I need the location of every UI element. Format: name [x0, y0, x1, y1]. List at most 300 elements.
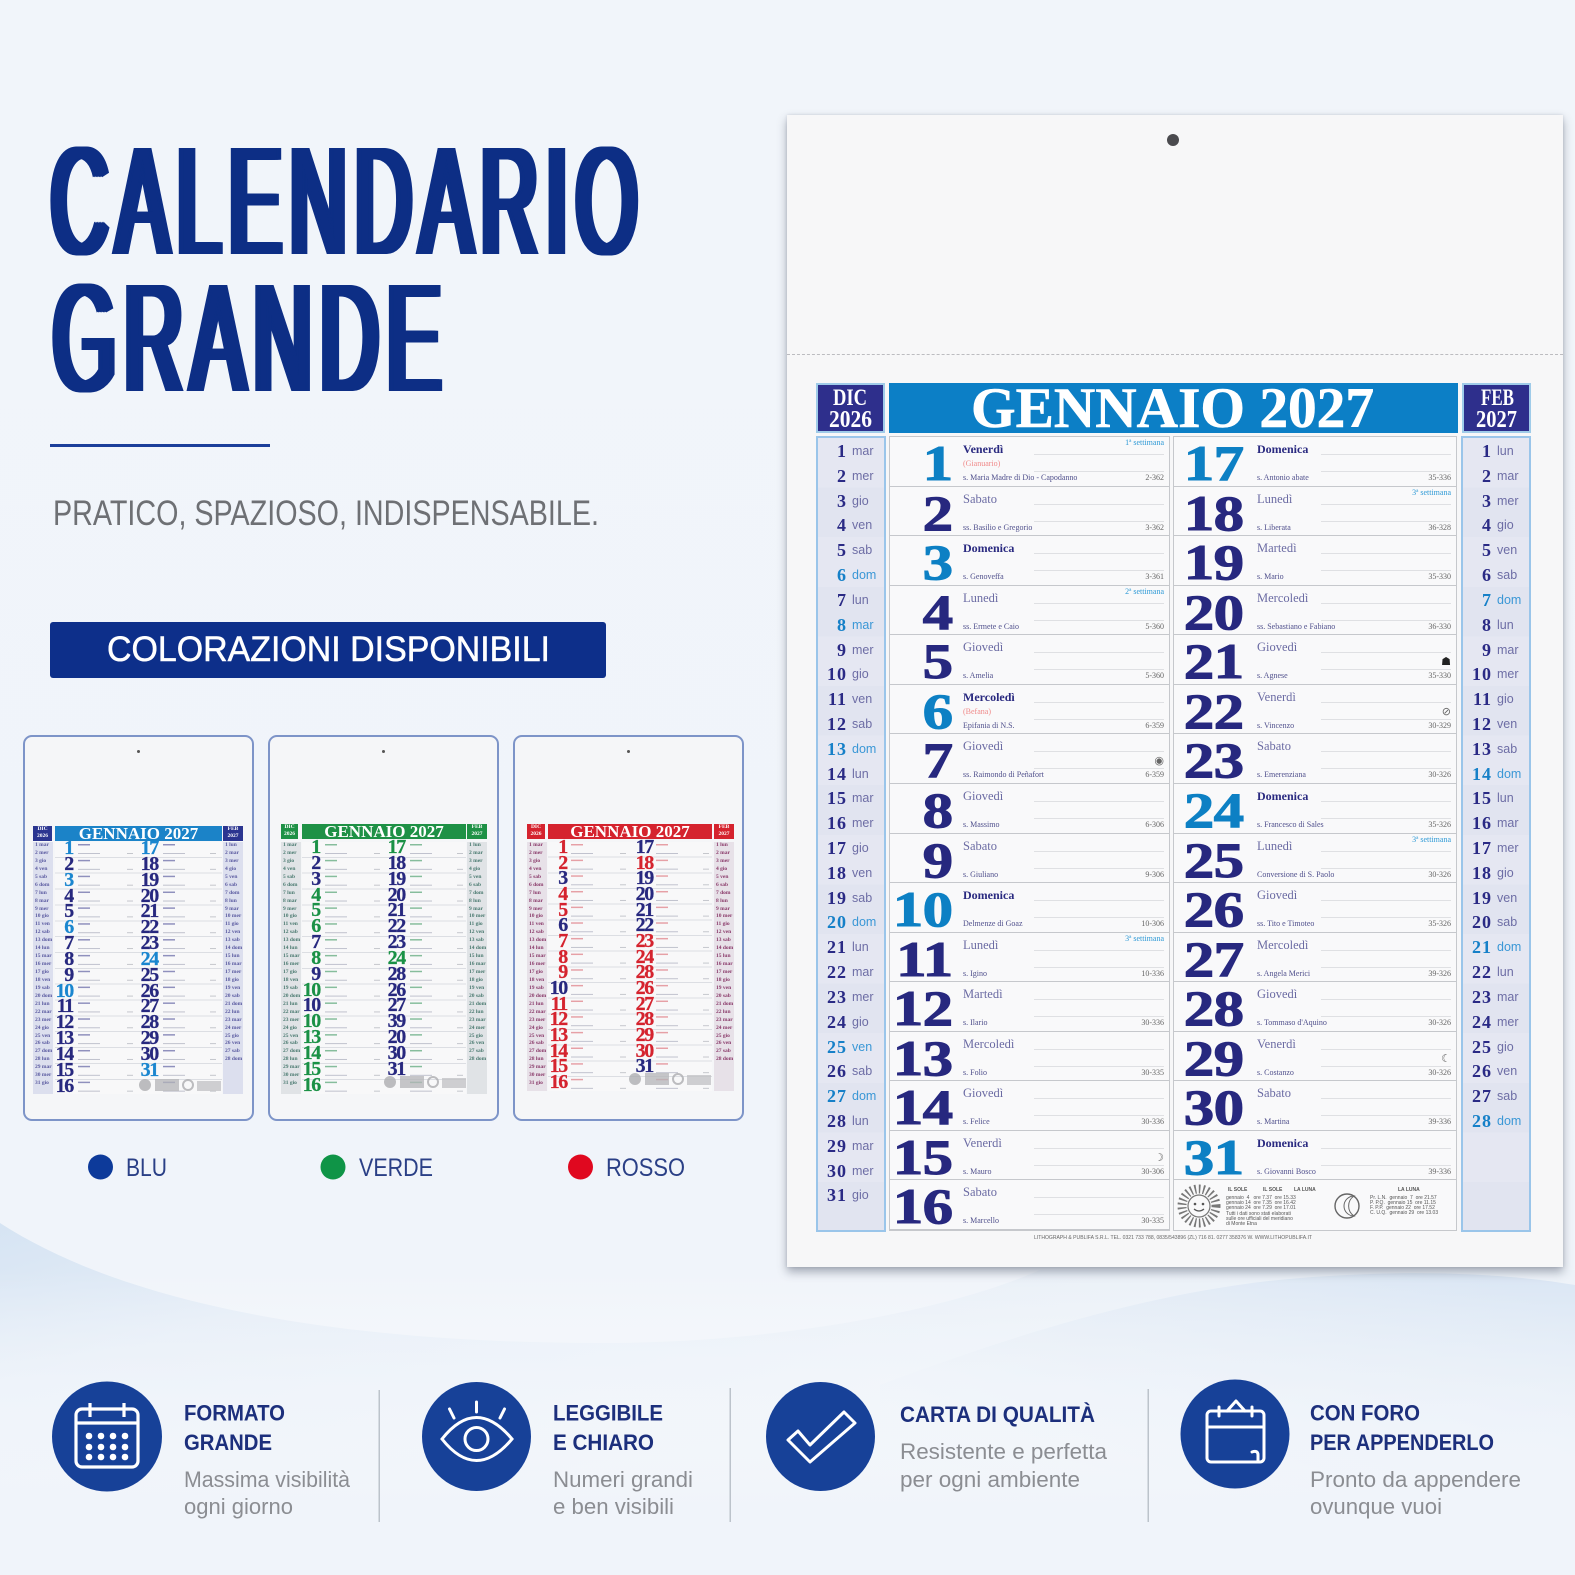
february side column: lun	[1497, 444, 1514, 458]
january days 1 to 16: 9	[923, 832, 952, 888]
december side column: 30	[827, 1161, 847, 1181]
january days 1 to 16: Giovedì	[963, 640, 1003, 654]
thumbnail: red calendar: 12	[550, 1008, 567, 1030]
january days 17 to 31 with sun and moon table: Domenica	[1257, 789, 1308, 803]
thumbnail: green calendar: 2026	[284, 830, 295, 836]
thumbnail: red calendar: 1	[558, 836, 567, 858]
thumbnail: red calendar: 21	[636, 899, 653, 921]
thumbnail: blue calendar: 4	[64, 885, 73, 907]
thumbnail: green calendar: 12 ven	[469, 929, 484, 935]
thumbnail: blue calendar: 5 sab	[35, 874, 47, 880]
heading and description: ogni giorno	[184, 1494, 293, 1519]
sun table text: sulle ore ufficiali del meridiano	[1226, 1216, 1293, 1222]
thumbnail: blue calendar: 1 mar	[35, 842, 49, 848]
january days 1 to 16: ss. Raimondo di Peñafort	[963, 770, 1044, 779]
thumbnail: blue calendar: 8 lun	[225, 898, 237, 904]
thumbnail: blue calendar: 10	[56, 980, 73, 1002]
december side column: dom	[852, 568, 876, 582]
thumbnail: red calendar: 22	[636, 914, 653, 936]
december side column: sab	[852, 543, 872, 557]
thumbnail: red calendar: 7 dom	[716, 890, 731, 896]
sun table text: gennaio 24 ore 7.29 ore 17.01	[1226, 1205, 1296, 1211]
legend: blu	[88, 1154, 167, 1182]
thumbnail: red calendar: 19 sab	[529, 985, 544, 991]
thumbnail: green calendar: 9 mar	[469, 906, 483, 912]
feature strip	[52, 1380, 1521, 1522]
thumbnail: red calendar: 2026	[530, 830, 542, 836]
thumbnail: green calendar: 6 dom	[283, 882, 298, 888]
heading and description	[184, 1400, 351, 1519]
thumbnail: green calendar: 8 lun	[469, 898, 481, 904]
december side column: mar	[852, 1139, 874, 1153]
thumbnail: green calendar: 21 dom	[469, 1001, 486, 1007]
january days 17 to 31 with sun and moon table: 30	[1184, 1079, 1244, 1135]
february side column: 7	[1482, 590, 1492, 610]
icon: moon	[1335, 1194, 1359, 1218]
december side column: 19	[827, 888, 847, 908]
thumbnail: green calendar: 31 gio	[283, 1080, 297, 1086]
february side column: 1	[1482, 441, 1492, 461]
thumbnail: blue calendar: 25 ven	[35, 1032, 50, 1038]
thumbnail: blue calendar: FEB	[228, 826, 238, 832]
january days 17 to 31 with sun and moon table: 27	[1184, 931, 1244, 987]
thumbnail: blue calendar: 7 lun	[35, 890, 47, 896]
heading and description: e ben visibili	[553, 1494, 674, 1519]
thumbnail: red calendar: 10 gio	[529, 913, 543, 919]
february side column: 20	[1472, 912, 1492, 932]
january days 17 to 31 with sun and moon table: 35-326	[1428, 820, 1451, 829]
january days 1 to 16: 3-361	[1145, 572, 1164, 581]
january days 17 to 31 with sun and moon table: Venerdì	[1257, 1037, 1296, 1051]
december side column: 26	[827, 1061, 847, 1081]
december side column: 6	[837, 565, 847, 585]
thumbnail: blue calendar: 15 mar	[35, 953, 52, 959]
thumbnail: red calendar: 9 mer	[529, 906, 543, 912]
january days 1 to 16: 10-306	[1141, 919, 1164, 928]
january days 17 to 31 with sun and moon table: Giovedì	[1257, 640, 1297, 654]
february side column: 8	[1482, 615, 1492, 635]
icon: eye	[422, 1382, 531, 1491]
february side column: sab	[1497, 1089, 1517, 1103]
january days 17 to 31 with sun and moon table: Lunedì	[1257, 838, 1292, 852]
february side column: ven	[1497, 891, 1517, 905]
thumbnail: blue calendar: 22 lun	[225, 1009, 240, 1015]
february side column: 9	[1482, 640, 1492, 660]
moon table text: F. P.P. gennaio 22 ore 17.52	[1370, 1205, 1435, 1211]
december side column: 16	[827, 813, 847, 833]
thumbnail: green calendar: 27 dom	[283, 1048, 300, 1054]
january days 1 to 16: (Gianuario)	[963, 459, 1000, 468]
january days 1 to 16: s. Amelia	[963, 671, 993, 680]
january days 17 to 31 with sun and moon table: Giovedì	[1257, 888, 1297, 902]
january days 17 to 31 with sun and moon table: s. Liberata	[1257, 523, 1291, 532]
thumbnail: green calendar: 13 dom	[283, 937, 300, 943]
december side column: mar	[852, 965, 874, 979]
february side column: dom	[1497, 593, 1521, 607]
sun table text	[1226, 1187, 1316, 1227]
thumbnail: red calendar: 20	[636, 883, 653, 905]
december side column: 4	[837, 515, 847, 535]
january days 17 to 31 with sun and moon table: 26	[1184, 881, 1244, 937]
december side column: sab	[852, 1064, 872, 1078]
thumbnail: blue calendar: 18 ven	[35, 977, 50, 983]
thumbnail: red calendar: 23	[636, 930, 653, 952]
thumbnail: blue calendar: 5 ven	[225, 874, 237, 880]
thumbnail: red calendar: 15 lun	[716, 953, 731, 959]
heading and description	[553, 1400, 693, 1519]
thumbnail: blue calendar: 25 gio	[225, 1032, 239, 1038]
january days 17 to 31 with sun and moon table: 36-330	[1428, 622, 1451, 631]
january days 1 to 16: Sabato	[963, 838, 997, 852]
thumbnail: red calendar: 15	[550, 1055, 567, 1077]
january days 1 to 16: Domenica	[963, 541, 1014, 555]
thumbnail: blue calendar: 27 dom	[35, 1048, 52, 1054]
january days 1 to 16: Sabato	[963, 1185, 997, 1199]
december side column: 7	[837, 590, 847, 610]
thumbnail: red calendar: 30	[636, 1040, 653, 1062]
thumbnail: blue calendar: 26	[141, 980, 158, 1002]
thumbnail: blue calendar	[23, 735, 254, 1121]
thumbnail: blue calendar: 12 ven	[225, 929, 240, 935]
thumbnail: red calendar: 14	[550, 1040, 567, 1062]
january days 1 to 16: Venerdì	[963, 1136, 1002, 1150]
thumbnail: green calendar: 22	[388, 915, 405, 937]
thumbnail: red calendar: 30 mer	[529, 1072, 545, 1078]
december side column: 27	[827, 1086, 847, 1106]
february side column: 25	[1472, 1036, 1492, 1056]
thumbnail: red calendar: 16 mar	[716, 961, 733, 967]
thumbnail: green calendar: 23	[388, 931, 405, 953]
thumbnail: red calendar: 25 ven	[529, 1032, 544, 1038]
thumbnail: blue calendar: 28	[141, 1011, 158, 1033]
december side column: lun	[852, 767, 869, 781]
january days 17 to 31 with sun and moon table: 35-330	[1428, 671, 1451, 680]
thumbnail: blue calendar: 2 mer	[35, 850, 49, 856]
january days 1 to 16: Martedì	[963, 987, 1003, 1001]
january days 1 to 16: Venerdì	[963, 442, 1003, 456]
january days 1 to 16: 30-306	[1141, 1167, 1164, 1176]
heading and description: Massima visibilità	[184, 1467, 351, 1492]
thumbnail: blue calendar: 6	[64, 916, 73, 938]
january days 1 to 16: 15	[893, 1129, 952, 1185]
january days 17 to 31 with sun and moon table: Conversione di S. Paolo	[1257, 870, 1334, 878]
heading and description: Pronto da appendere	[1310, 1467, 1521, 1492]
thumbnail: blue calendar: 8 mar	[35, 898, 49, 904]
january days 17 to 31 with sun and moon table: Sabato	[1257, 1086, 1291, 1100]
thumbnail: red calendar: 20 sab	[716, 993, 731, 999]
january days 1 to 16: s. Giuliano	[963, 870, 998, 878]
large calendar sheet	[787, 115, 1563, 1267]
thumbnail: red calendar: 28	[636, 961, 653, 983]
january days 17 to 31 with sun and moon table: s. Agnese	[1257, 671, 1288, 680]
december side column: 18	[827, 863, 847, 883]
thumbnail: green calendar: 15 lun	[469, 953, 484, 959]
january days 17 to 31 with sun and moon table: 30-329	[1428, 721, 1451, 730]
thumbnail: blue calendar: 13	[56, 1027, 73, 1049]
sun table text: gennaio 4 ore 7.37 ore 15.33	[1226, 1195, 1296, 1201]
january days 1 to 16: s. Mauro	[963, 1167, 991, 1176]
february side column: mar	[1497, 642, 1519, 656]
february side column: 27	[1472, 1086, 1492, 1106]
thumbnail: green calendar: 17	[388, 836, 405, 858]
thumbnail: green calendar: 28	[388, 963, 405, 985]
hanging hole	[1167, 134, 1179, 146]
thumbnail: red calendar: 16 mer	[529, 961, 545, 967]
thumbnail: blue calendar: 14 lun	[35, 945, 50, 951]
thumbnail: red calendar: 3	[558, 867, 567, 889]
february side column: 21	[1472, 937, 1492, 957]
thumbnail: blue calendar: 20	[141, 885, 158, 907]
previous month box	[816, 383, 885, 433]
title underline rule	[50, 444, 270, 447]
thumbnail: blue calendar: 10 gio	[35, 913, 49, 919]
thumbnail: green calendar: 28 dom	[469, 1056, 486, 1062]
feature: formato grande	[52, 1382, 351, 1519]
thumbnail: blue calendar: 9 mer	[35, 906, 49, 912]
thumbnail: red calendar: 20 dom	[529, 993, 546, 999]
february side column: 17	[1472, 838, 1492, 858]
december side column: gio	[852, 667, 869, 681]
thumbnail: red calendar: 6	[558, 914, 567, 936]
thumbnail: green calendar: 14	[303, 1042, 320, 1064]
thumbnail: red calendar: 4 gio	[716, 866, 727, 872]
thumbnail: blue calendar: 2 mar	[225, 850, 239, 856]
january days 1 to 16: Giovedì	[963, 739, 1003, 753]
january days 17 to 31 with sun and moon table: ☗	[1441, 655, 1451, 668]
sun table text: IL SOLE	[1228, 1187, 1248, 1193]
previous month box: DIC	[833, 385, 867, 410]
february side column: 12	[1472, 714, 1492, 734]
title: CALENDARIO	[51, 114, 646, 286]
january days 1 to 16: ☽	[1154, 1151, 1164, 1164]
december side column: mar	[852, 791, 874, 805]
january days 17 to 31 with sun and moon table: s. Mario	[1257, 572, 1284, 581]
next month box: 2027	[1476, 407, 1517, 433]
left text column	[50, 444, 606, 678]
thumbnail: red calendar: 8 mar	[529, 898, 543, 904]
thumbnail: green calendar: 10 mer	[469, 913, 485, 919]
december side column: 31	[827, 1185, 847, 1205]
thumbnail: green calendar: DIC	[284, 824, 295, 830]
thumbnail: red calendar: 26	[636, 977, 653, 999]
legend: rosso: ROSSO	[606, 1154, 685, 1182]
thumbnail: blue calendar: 4 ven	[35, 866, 47, 872]
december side column: 25	[827, 1036, 847, 1056]
thumbnail: green calendar: 4	[311, 884, 320, 906]
january days 17 to 31 with sun and moon table: Mercoledì	[1257, 591, 1308, 605]
december side column: mer	[852, 1164, 874, 1178]
thumbnail: blue calendar: 22 mar	[35, 1009, 52, 1015]
moon table text: Pr. L.N. gennaio 7 ore 21.57	[1370, 1195, 1437, 1201]
thumbnail: red calendar: 27 sab	[716, 1048, 731, 1054]
january days 17 to 31 with sun and moon table: 35-330	[1428, 572, 1451, 581]
thumbnail: blue calendar: 9	[64, 964, 73, 986]
thumbnail: green calendar: 5 ven	[469, 874, 481, 880]
thumbnail: blue calendar: 14 dom	[225, 945, 242, 951]
thumbnail: green calendar: 25 gio	[469, 1032, 483, 1038]
january days 17 to 31 with sun and moon table: s. Emerenziana	[1257, 770, 1306, 779]
thumbnail: green calendar: 19	[388, 868, 405, 890]
thumbnail: green calendar: 30	[388, 1042, 405, 1064]
january days 1 to 16: 30-336	[1141, 1117, 1164, 1126]
thumbnail: blue calendar: 30	[141, 1043, 158, 1065]
thumbnail: blue calendar: 17 gio	[35, 969, 49, 975]
january days 1 to 16: Mercoledì	[963, 1037, 1014, 1051]
february side column: 24	[1472, 1012, 1492, 1032]
january days 17 to 31 with sun and moon table: 22	[1184, 683, 1244, 739]
january days 17 to 31 with sun and moon table: 39-336	[1428, 1117, 1451, 1126]
february side column: 26	[1472, 1061, 1492, 1081]
january days 17 to 31 with sun and moon table: 39-326	[1428, 969, 1451, 978]
thumbnail: red calendar: DIC	[531, 824, 541, 830]
thumbnail: green calendar: 4 gio	[469, 866, 480, 872]
january days 1 to 16: 14	[893, 1079, 952, 1135]
thumbnail: green calendar: 7	[311, 931, 320, 953]
thumbnail: green calendar: 3	[311, 868, 320, 890]
feature: leggibile e chiaro	[422, 1382, 693, 1519]
december side column: sab	[852, 891, 872, 905]
december side column: 12	[827, 714, 847, 734]
january days 17 to 31 with sun and moon table: 35-326	[1428, 919, 1451, 928]
thumbnail: blue calendar: 11 ven	[35, 921, 50, 927]
thumbnail: red calendar: 15 mar	[529, 953, 546, 959]
february side column: 23	[1472, 987, 1492, 1007]
thumbnail: red calendar: 11 ven	[529, 921, 544, 927]
january days 17 to 31 with sun and moon table: ss. Tito e Timoteo	[1257, 919, 1314, 928]
thumbnail: red calendar: 18 gio	[716, 977, 730, 983]
thumbnail: red calendar: 8	[558, 946, 567, 968]
february side column: sab	[1497, 915, 1517, 929]
thumbnail: red calendar: 24 mer	[716, 1025, 732, 1031]
december side column: mar	[852, 444, 874, 458]
thumbnail: green calendar: 4 ven	[283, 866, 295, 872]
january days 1 to 16: 1	[923, 435, 952, 491]
february side column: mar	[1497, 816, 1519, 830]
icon: hanging calendar	[1180, 1380, 1290, 1488]
thumbnail: green calendar: 26	[388, 979, 405, 1001]
february side column: 11	[1473, 689, 1492, 709]
thumbnail: blue calendar: 15	[56, 1059, 73, 1081]
thumbnail: blue calendar: 5	[64, 900, 73, 922]
thumbnail: blue calendar: 15 lun	[225, 953, 240, 959]
thumbnail: green calendar: 15	[303, 1058, 320, 1080]
december side column: ven	[852, 518, 872, 532]
thumbnail: red calendar: 17 mer	[716, 969, 732, 975]
january days 1 to 16: 5	[923, 633, 952, 689]
january days 17 to 31 with sun and moon table: ss. Sebastiano e Fabiano	[1257, 622, 1335, 631]
december side column: 17	[827, 838, 847, 858]
december side column: 8	[837, 615, 847, 635]
january days 1 to 16: 6-359	[1145, 770, 1164, 779]
icon: calendar	[52, 1382, 162, 1492]
heading and description: CARTA DI QUALITÀ	[900, 1402, 1095, 1427]
december side column: 29	[827, 1136, 847, 1156]
heading and description: LEGGIBILE	[553, 1400, 663, 1426]
december side column: 21	[827, 937, 847, 957]
february side column: 3	[1482, 491, 1492, 511]
thumbnail: blue calendar: 11	[57, 995, 73, 1017]
december side column: 14	[827, 764, 847, 784]
january days 17 to 31 with sun and moon table: 31	[1184, 1129, 1244, 1185]
thumbnail: red calendar: 9 mar	[716, 906, 730, 912]
heading and description	[900, 1402, 1108, 1492]
thumbnail: red calendar: 14 dom	[716, 945, 733, 951]
thumbnail: red calendar: 24	[636, 946, 653, 968]
january days 1 to 16: (Befana)	[963, 707, 991, 716]
thumbnail: blue calendar: 18	[141, 853, 158, 875]
thumbnail: red calendar: 7 lun	[529, 890, 541, 896]
february side column: mar	[1497, 990, 1519, 1004]
thumbnail: blue calendar: 7	[64, 932, 73, 954]
thumbnail: blue calendar: 23 mer	[35, 1017, 51, 1023]
thumbnail: red calendar: 31 gio	[529, 1080, 543, 1086]
january days 17 to 31 with sun and moon table: 35-336	[1428, 473, 1451, 482]
february side column: sab	[1497, 742, 1517, 756]
heading and description: PER APPENDERLO	[1310, 1430, 1494, 1455]
thumbnail: green calendar: 11 gio	[469, 921, 483, 927]
january days 1 to 16: 2ª settimana	[1125, 587, 1164, 596]
moon table text: P. P.Q. gennaio 15 ore 11.15	[1370, 1200, 1436, 1206]
thumbnail: blue calendar: 22	[141, 916, 158, 938]
thumbnail: green calendar: 6 sab	[469, 882, 481, 888]
thumbnail: blue calendar: 1	[64, 837, 73, 859]
january days 1 to 16: s. Folio	[963, 1068, 987, 1077]
heading and description: Resistente e perfetta	[900, 1439, 1108, 1464]
thumbnail: red calendar: 10	[550, 977, 567, 999]
january days 1 to 16: s. Massimo	[963, 820, 999, 829]
thumbnail: red calendar: 12 sab	[529, 929, 544, 935]
thumbnail: red calendar: 25 gio	[716, 1032, 730, 1038]
thumbnail: blue calendar: 13 sab	[225, 937, 240, 943]
january days 1 to 16: Delmenze di Goaz	[963, 919, 1023, 928]
thumbnail: green calendar: 28 lun	[283, 1056, 298, 1062]
december side column: gio	[852, 494, 869, 508]
december side column: mer	[852, 642, 874, 656]
february side column: 6	[1482, 565, 1492, 585]
thumbnail: green calendar: 24 mer	[469, 1025, 485, 1031]
thumbnail: blue calendar: 25	[141, 964, 158, 986]
thumbnail: green calendar: 16 mer	[283, 961, 299, 967]
february side column: 19	[1472, 888, 1492, 908]
january days 17 to 31 with sun and moon table: Martedì	[1257, 541, 1297, 555]
december side column: 10	[827, 664, 847, 684]
february side column: gio	[1497, 518, 1514, 532]
thumbnail: green calendar: 39	[388, 1010, 405, 1032]
thumbnail: blue calendar: 29 mar	[35, 1064, 52, 1070]
icon: sun	[1182, 1189, 1216, 1223]
january days 1 to 16: 2	[923, 485, 952, 541]
thumbnail: green calendar: 10	[303, 979, 320, 1001]
december side column: mar	[852, 618, 874, 632]
thumbnail: red calendar: 16	[550, 1071, 567, 1093]
february side column: 22	[1472, 962, 1492, 982]
december side column: 15	[827, 788, 847, 808]
thumbnail: blue calendar: 16 mer	[35, 961, 51, 967]
banner: colorazioni disponibili	[50, 622, 606, 678]
calendar header bar	[816, 377, 1531, 440]
thumbnail: green calendar: FEB	[472, 824, 482, 830]
thumbnail: green calendar: 7 dom	[469, 890, 484, 896]
thumbnail: green calendar: 2 mar	[469, 850, 483, 856]
january days 1 to 16: 5-360	[1145, 622, 1164, 631]
thumbnail: green calendar: 23 mer	[283, 1017, 299, 1023]
thumbnail: red calendar: 26 ven	[716, 1040, 731, 1046]
january days 1 to 16: 16	[893, 1178, 952, 1234]
thumbnail: red calendar: 10 mer	[716, 913, 732, 919]
heading and description	[1310, 1400, 1521, 1519]
thumbnail: green calendar: 9	[311, 963, 320, 985]
february side column: gio	[1497, 1040, 1514, 1054]
